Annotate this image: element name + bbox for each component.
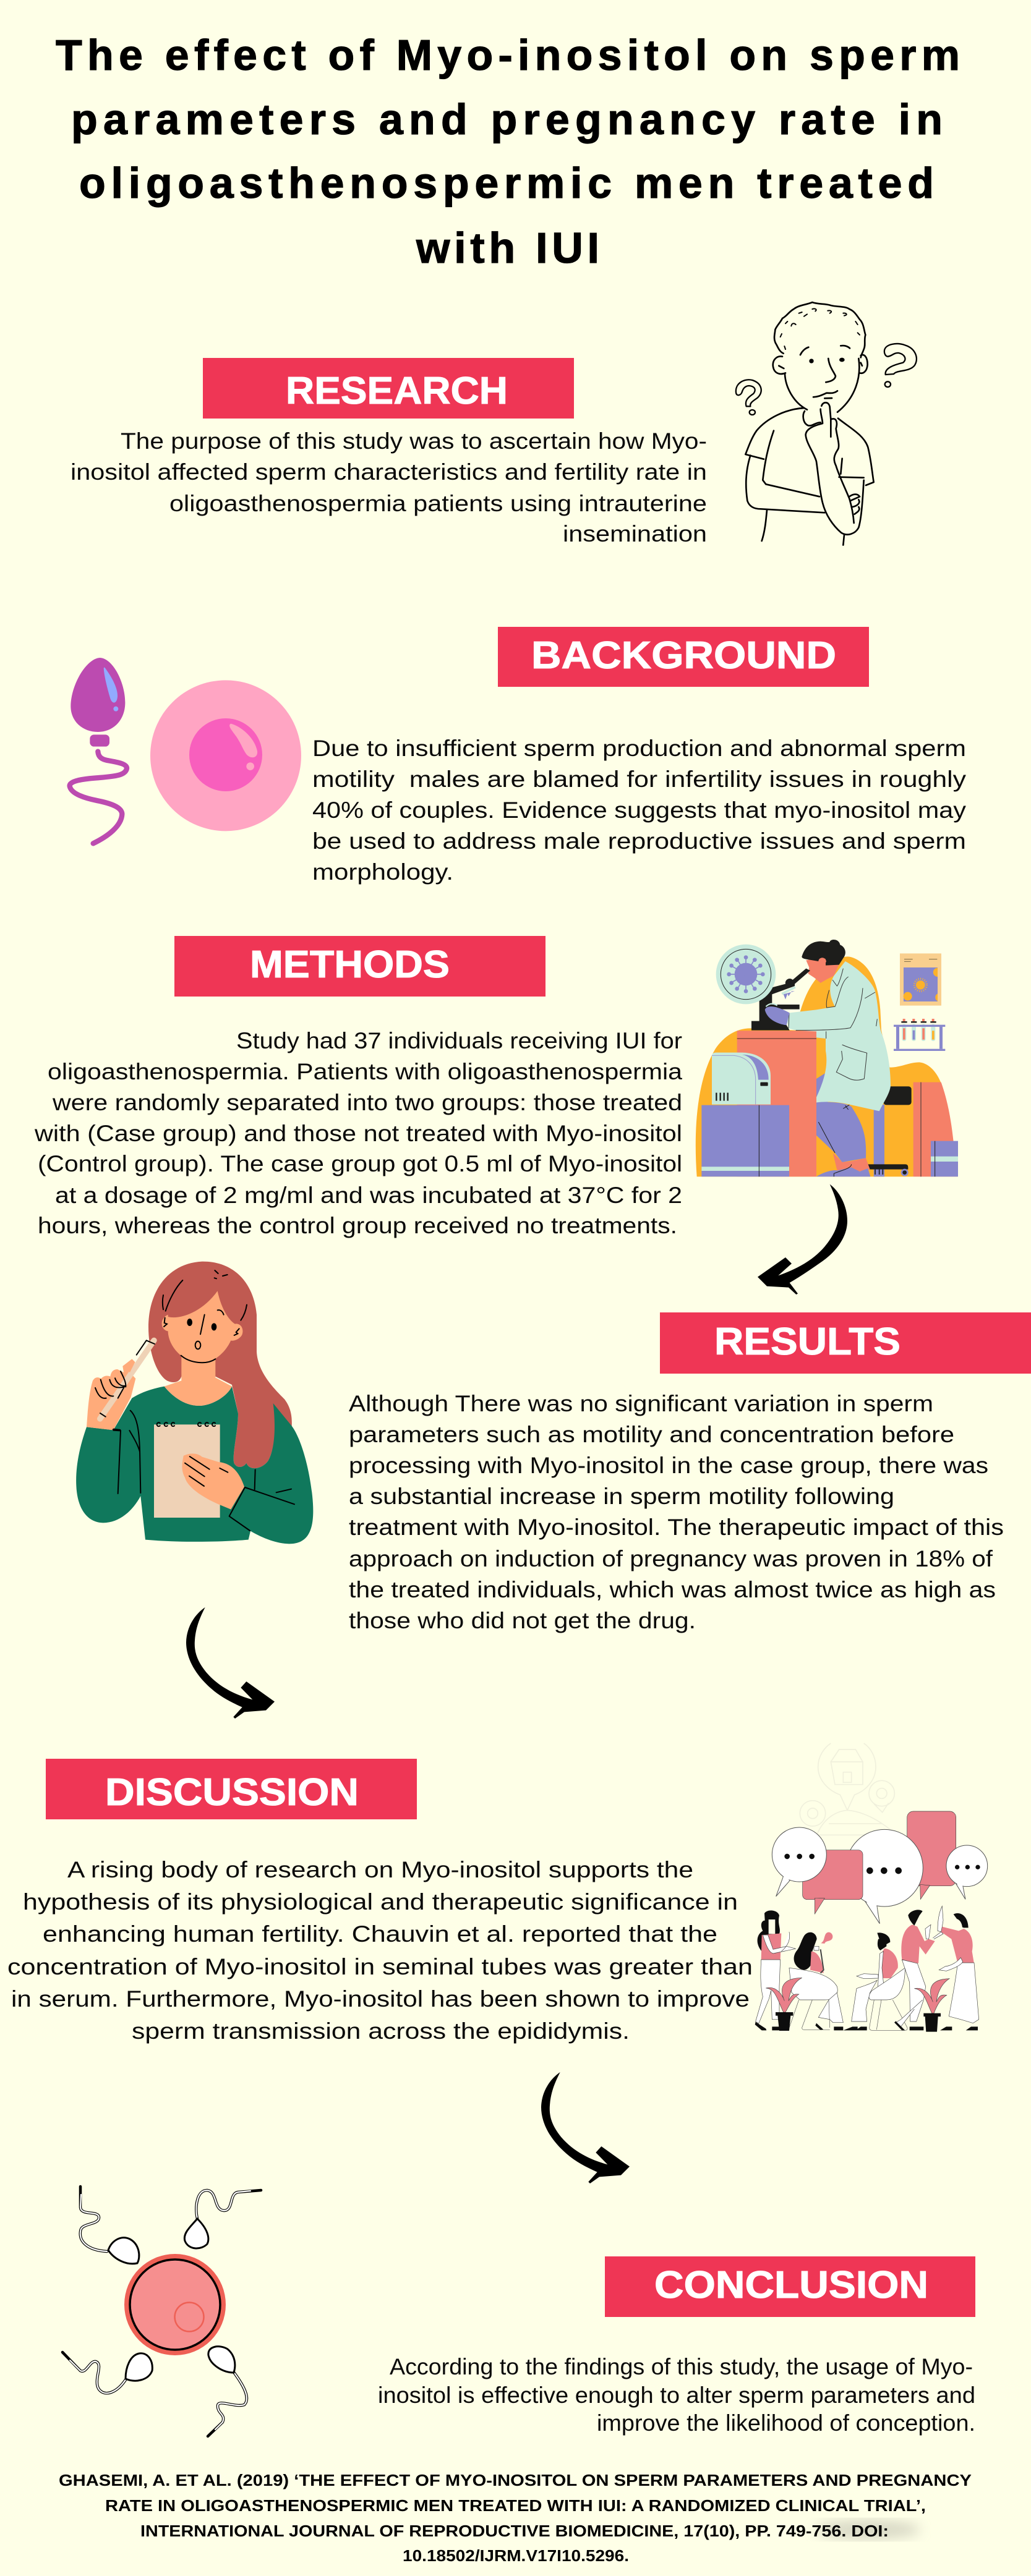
text block: methods: Study had 37 individuals receiving IUI for [236, 1028, 682, 1053]
title: with IUI [416, 224, 599, 272]
text block: discussion: sperm transmission across the epididymis. [132, 2018, 630, 2044]
heading: conclusion [605, 2256, 975, 2317]
citation: INTERNATIONAL JOURNAL OF REPRODUCTIVE BIOMEDICINE, 17(10), PP. 749-756. DOI: [140, 2522, 889, 2540]
person: standing man with glasses [894, 1910, 943, 2030]
heading: discussion [46, 1759, 417, 1819]
heading: background [498, 627, 869, 687]
heading: discussion: DISCUSSION [105, 1771, 359, 1814]
citation: 10.18502/IJRM.V17I10.5296. [403, 2546, 629, 2565]
text block: results: the treated individuals, which was almost twice as high as [349, 1577, 996, 1602]
illustration: people talking with speech bubbles [755, 1743, 988, 2032]
arrow: discussion to conclusion [541, 2072, 630, 2183]
text block: methods: with (Case group) and those not treated with Myo-inositol [34, 1121, 682, 1146]
heading: results: RESULTS [714, 1320, 901, 1363]
heading: methods: METHODS [250, 943, 450, 986]
text block: results [349, 1391, 1004, 1633]
arrow: results to discussion [186, 1607, 275, 1719]
text block: results: parameters such as motility and concentration before [349, 1422, 954, 1447]
text block: results: processing with Myo-inositol in the case group, there was [349, 1453, 988, 1478]
text block: background: motility males are blamed for infertility issues in roughly [312, 767, 967, 792]
text block: discussion: enhancing human fertility. Chauvin et al. reported that the [43, 1921, 717, 1947]
heading: research [203, 358, 574, 419]
text block: results: treatment with Myo-inositol. The therapeutic impact of this [349, 1515, 1004, 1540]
text block: discussion: hypothesis of its physiological and therapeutic significance in [23, 1889, 738, 1915]
text block: background: morphology. [312, 859, 453, 885]
illustration: egg surrounded by sperm [62, 2187, 261, 2436]
text block: conclusion: According to the findings of this study, the usage of Myo- [390, 2354, 973, 2379]
citation [59, 2471, 972, 2565]
text block: methods: at a dosage of 2 mg/ml and was incubated at 37°C for 2 [55, 1183, 682, 1208]
text block: research: oligoasthenospermia patients using intrauterine [169, 491, 707, 516]
icon: thinking man [736, 302, 917, 545]
person: standing woman left [755, 1910, 796, 2030]
citation: GHASEMI, A. ET AL. (2019) ‘THE EFFECT OF MYO-INOSITOL ON SPERM PARAMETERS AND PREGNANCY [59, 2471, 972, 2489]
text block: results: those who did not get the drug. [349, 1608, 696, 1633]
illustration: scientist at microscope [696, 940, 958, 1176]
text block: background [312, 736, 967, 885]
text block: discussion: in serum. Furthermore, Myo-inositol has been shown to improve [11, 1986, 750, 2012]
person: woman in white skirt [938, 1906, 979, 2030]
illustration: woman with notepad [76, 1262, 313, 1544]
heading: research: RESEARCH [286, 370, 508, 412]
text block: research: insemination [563, 521, 707, 546]
title: parameters and pregnancy rate in [71, 95, 943, 143]
text block: discussion: A rising body of research on Myo-inositol supports the [67, 1857, 693, 1882]
text block: background: Due to insufficient sperm production and abnormal sperm [312, 736, 966, 761]
text block: discussion: concentration of Myo-inositol in seminal tubes was greater than [7, 1954, 753, 1979]
heading: methods [174, 936, 545, 997]
title: The effect of Myo-inositol on sperm [56, 31, 960, 79]
title: oligoasthenospermic men treated [79, 159, 934, 207]
text block: methods: (Control group). The case group got 0.5 ml of Myo-inositol [38, 1151, 682, 1176]
heading: results [660, 1312, 1031, 1374]
icon: sperm and egg cell [70, 658, 301, 843]
text block: research: The purpose of this study was to ascertain how Myo- [121, 428, 707, 454]
text block: discussion [7, 1857, 753, 2044]
arrow: methods to results [758, 1184, 847, 1294]
plant: left [766, 1978, 802, 2031]
heading: background: BACKGROUND [531, 634, 836, 677]
text block: methods: oligoasthenospermia. Patients with oligoasthenospermia [48, 1059, 682, 1084]
smudge behind citation [815, 2520, 920, 2540]
text block: methods: were randomly separated into two groups: those treated [52, 1090, 682, 1115]
text block: research: inositol affected sperm characteristics and fertility rate in [71, 459, 707, 485]
text block: results: a substantial increase in sperm motility following [349, 1484, 894, 1509]
title [56, 31, 960, 272]
text block: conclusion [378, 2354, 975, 2436]
text block: results: approach on induction of pregnancy was proven in 18% of [349, 1546, 993, 1571]
person: seated woman with cup [789, 1932, 843, 2030]
text block: background: 40% of couples. Evidence suggests that myo-inositol may [312, 797, 967, 823]
citation: RATE IN OLIGOASTHENOSPERMIC MEN TREATED WITH IUI: A RANDOMIZED CLINICAL TRIAL’, [105, 2496, 926, 2515]
text block: conclusion: inositol is effective enough to alter sperm parameters and [378, 2383, 975, 2408]
text block: results: Although There was no significant variation in sperm [349, 1391, 933, 1416]
heading: conclusion: CONCLUSION [654, 2264, 928, 2306]
text block: methods [34, 1028, 682, 1238]
plant: right [914, 1979, 949, 2032]
text block: methods: hours, whereas the control group received no treatments. [38, 1213, 677, 1238]
text block: conclusion: improve the likelihood of conception. [597, 2410, 975, 2436]
text block: research [71, 428, 707, 546]
person: seated bearded man [843, 1932, 907, 2030]
text block: background: be used to address male reproductive issues and sperm [312, 828, 966, 854]
